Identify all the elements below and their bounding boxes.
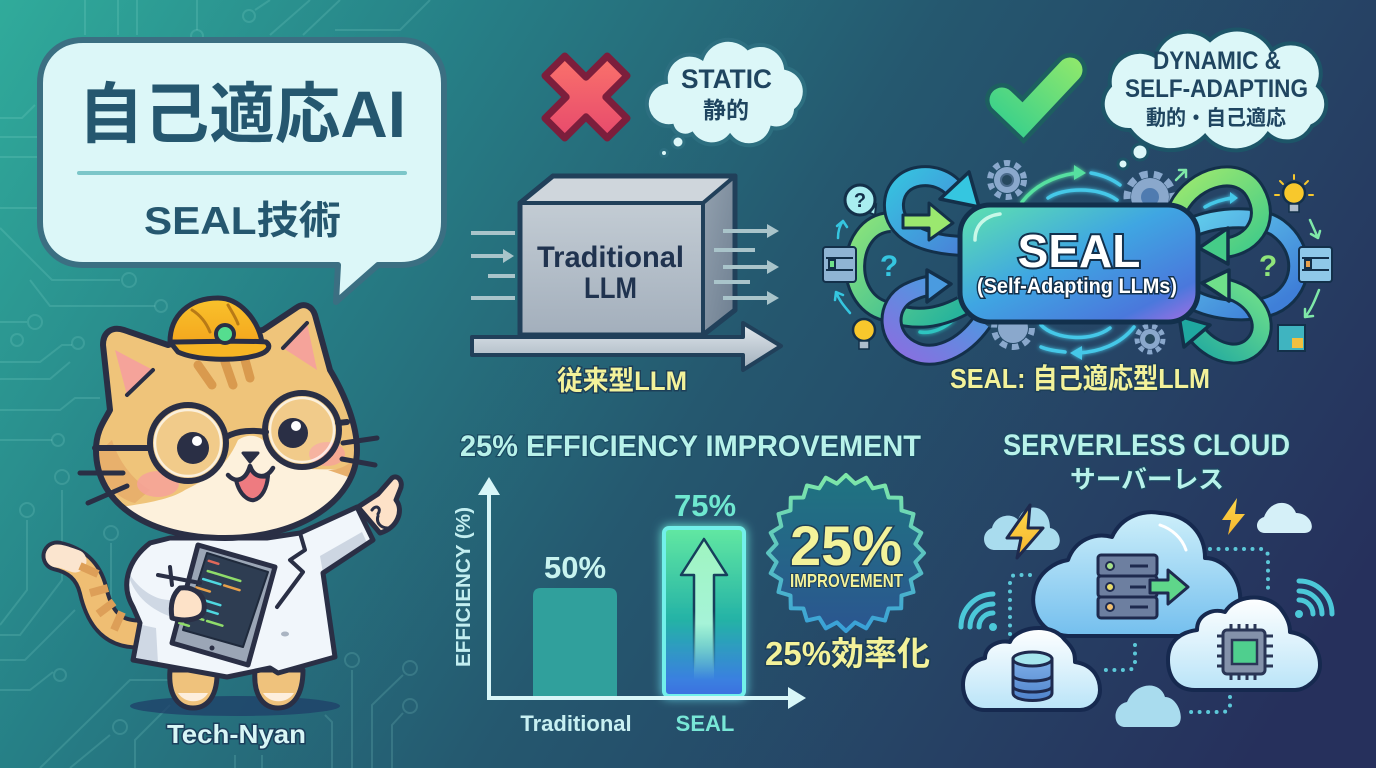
long arrow [472,323,781,370]
category labels: Traditional [520,711,632,736]
trad bar [533,588,617,696]
mascot name: Tech-Nyan [167,719,306,749]
heading: serverless [1003,429,1290,494]
improvement badge: IMPROVEMENT [790,571,903,591]
icon: question bubble [845,185,876,215]
question marks: ? [880,250,898,283]
circuit pattern [0,0,430,768]
tail [57,556,138,634]
thought cloud: dynamic: DYNAMIC & [1153,47,1281,75]
seal bar [664,528,744,696]
heading: serverless: サーバーレス [1070,466,1224,494]
icon: red cross [524,35,648,159]
icon: database [1013,652,1052,700]
icon: server [1098,555,1188,618]
traditional LLM block: LLM [584,272,637,305]
left green band [855,222,962,318]
title speech bubble [40,40,444,302]
title: 自己適応AI [78,77,406,151]
gears [990,163,1173,352]
SEAL core box: SEAL [1018,225,1140,277]
icon: question bubble: ? [854,190,866,212]
thought cloud: dynamic: 動的・自己適応 [1146,107,1286,130]
SEAL core box [960,205,1198,322]
icon: green check [1002,70,1070,120]
icon: chip [1217,624,1273,680]
green inner arrow [903,203,953,240]
thought cloud: static: STATIC [681,64,772,94]
right blue band [1190,218,1298,310]
subtitle: SEAL技術 [144,200,341,243]
small clouds [984,508,1060,550]
top-left loop arrow [894,172,979,246]
bottom-left loop arrow [892,270,982,355]
input arrows [471,233,515,298]
pointing hand [358,477,401,533]
heading: efficiency: 25% EFFICIENCY IMPROVEMENT [460,430,921,463]
block label: Traditional [537,241,684,274]
database cloud [963,628,1100,710]
icon: light bulbs [853,175,1313,349]
thought cloud: static [647,40,805,157]
holding hand [171,588,204,620]
axes [478,477,806,709]
hat [170,298,269,359]
caption: SEAL: SEAL: 自己適応型LLM [950,363,1210,394]
small arrows [835,170,1320,317]
bar chart [453,477,806,736]
mascot: Tech-Nyan cat [57,298,401,716]
improvement badge: 25% [790,514,902,577]
legs [170,670,217,708]
bar chart: SEAL [676,711,734,736]
bottom-right loop arrow [1179,270,1262,354]
SEAL core box: (Self-Adapting LLMs) [977,275,1177,298]
icon: UI panels [823,247,1332,351]
ears inner [115,350,153,395]
icon: lightning bolts [1007,498,1245,558]
block [520,176,735,335]
bubble shape [40,40,444,302]
thought cloud: dynamic: SELF-ADAPTING [1125,75,1308,103]
question marks: ? [1259,250,1277,283]
traditional LLM block [471,176,781,370]
bar chart: 75% [674,488,736,523]
serverless cloud diagram [961,498,1332,727]
icon: wifi signals [961,581,1332,630]
glasses [95,393,347,481]
tablet [172,545,275,665]
main cloud [1033,512,1240,636]
head [96,305,357,538]
nose and mouth [243,453,258,462]
caption: traditional LLM: 従来型LLM [557,366,687,396]
shadow [130,696,340,716]
dotted connectors [1010,549,1268,712]
seal bar arrow [682,539,727,680]
chip cloud [1168,597,1320,690]
caption: efficiency: 25%効率化 [765,635,930,672]
lab coat [127,507,373,677]
thought cloud: dynamic [1103,29,1326,169]
eyes [177,432,209,464]
thought cloud: static: 静的 [703,97,749,123]
top-right loop arrow [1178,176,1261,264]
SEAL loop diagram [823,163,1332,360]
value labels: 50% [544,550,606,585]
question marks [880,250,1277,283]
face markings [99,360,352,535]
heading: serverless: SERVERLESS CLOUD [1003,429,1290,462]
y axis label: EFFICIENCY (%) [453,507,475,667]
output arrows [714,224,779,305]
glow arcs [920,165,1238,360]
whiskers [80,438,377,503]
improvement badge [768,475,924,631]
